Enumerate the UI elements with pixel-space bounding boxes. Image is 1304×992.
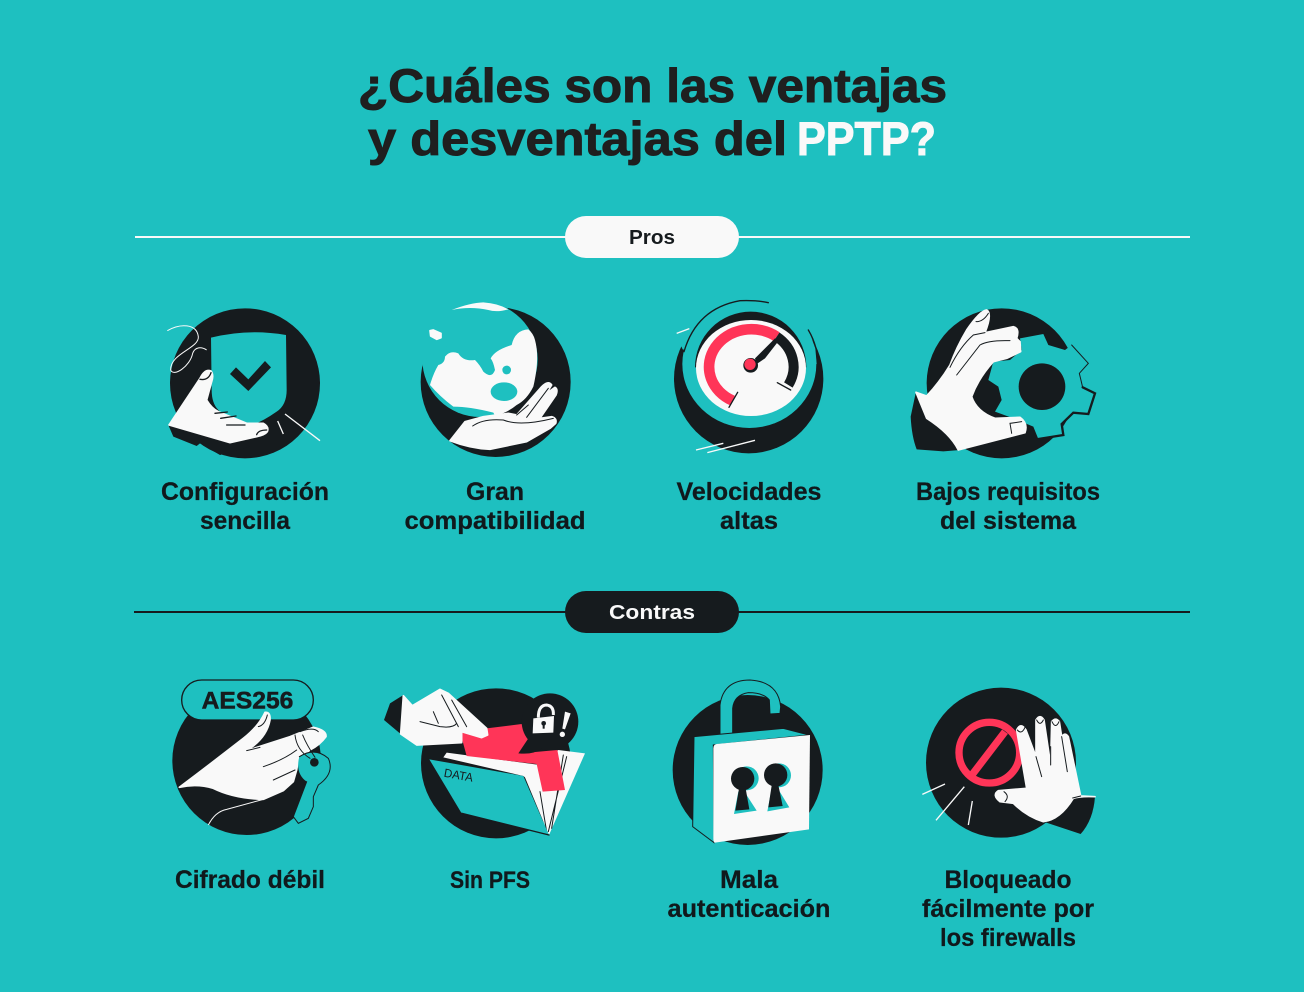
- heading: Contras: [565, 591, 739, 633]
- label: Mala autenticación: Mala: [720, 866, 779, 894]
- heading: Pros: [565, 216, 739, 258]
- heading: Contras: Contras: [609, 602, 695, 624]
- label: Bajos requisitos del sistema: [916, 478, 1100, 535]
- icon: data folder with lock: DATA: [443, 766, 474, 785]
- label: Mala autenticación: [668, 866, 830, 923]
- icon: weak key AES256: AES256: [202, 687, 293, 714]
- label: Bloqueado fácilmente por los firewalls: Bloqueado: [944, 866, 1072, 894]
- label: Configuración sencilla: sencilla: [200, 507, 291, 535]
- label: Mala autenticación: autenticación: [668, 895, 830, 923]
- icon: speedometer: [670, 290, 823, 453]
- label: Sin PFS: Sin PFS: [450, 867, 530, 894]
- label: Velocidades altas: [676, 478, 822, 535]
- label: Bajos requisitos del sistema: Bajos requisitos: [916, 478, 1100, 506]
- label: Bloqueado fácilmente por los firewalls: [922, 866, 1094, 952]
- heading: Pros: Pros: [629, 227, 675, 249]
- title: y desventajas del: [368, 112, 787, 165]
- label: Cifrado débil: Cifrado débil: [175, 866, 325, 894]
- icon: hand blocking: [922, 688, 1095, 838]
- title: ¿Cuáles son las ventajas: [358, 59, 947, 112]
- icon: hand holding gear: [911, 308, 1095, 458]
- label: Bloqueado fácilmente por los firewalls: fácilmente por: [922, 895, 1094, 923]
- label: Gran compatibilidad: Gran: [466, 478, 524, 506]
- icon: globe in hand: [421, 300, 571, 457]
- title: [358, 59, 947, 165]
- label: Gran compatibilidad: [404, 478, 586, 535]
- icon: padlock with two keyholes: [673, 680, 823, 845]
- icon: data folder with lock: [384, 688, 585, 838]
- icon: shield in hand: [167, 308, 320, 458]
- label: Bloqueado fácilmente por los firewalls: los firewalls: [940, 924, 1076, 952]
- title: PPTP?: [797, 112, 936, 165]
- label: Velocidades altas: altas: [720, 507, 778, 535]
- icon: weak key AES256: [172, 680, 330, 835]
- label: Gran compatibilidad: compatibilidad: [404, 507, 586, 535]
- label: Configuración sencilla: [161, 478, 329, 535]
- label: Bajos requisitos del sistema: del sistema: [940, 507, 1077, 535]
- label: Velocidades altas: Velocidades: [676, 478, 822, 506]
- label: Configuración sencilla: Configuración: [161, 478, 329, 506]
